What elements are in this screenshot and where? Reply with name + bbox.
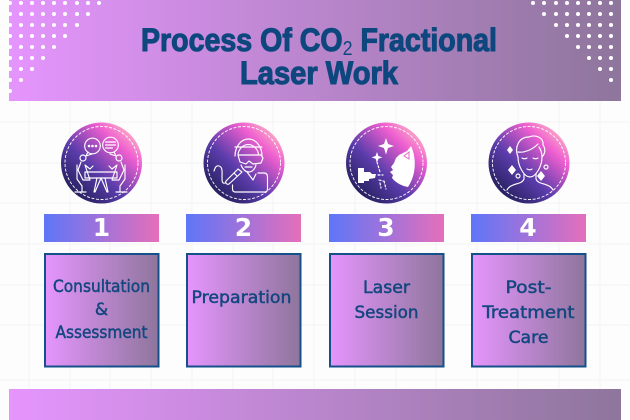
title: Laser Work (240, 55, 398, 91)
card 2 (187, 254, 300, 366)
title: Fractional (353, 22, 497, 58)
card 1: Consultation (53, 277, 150, 297)
number bar 2 (186, 213, 301, 242)
title: Process Of CO (141, 22, 367, 58)
icon: post-treatment care (488, 122, 570, 204)
icon: laser session (346, 122, 427, 204)
step 3 column (329, 122, 444, 366)
card 4: Post- (506, 278, 552, 298)
number bar 3 (329, 213, 444, 242)
number bar 1: 1 (93, 213, 110, 242)
card 3: Session (354, 303, 418, 323)
number bar 2: 2 (235, 213, 252, 242)
footer banner (9, 389, 621, 420)
number bar 1 (44, 213, 159, 242)
icon: preparation (204, 122, 284, 204)
dot pattern right (531, 1, 613, 82)
card 1 (45, 254, 158, 366)
card 4 (472, 254, 586, 366)
step 2 column (186, 122, 301, 366)
card 4: Treatment (481, 303, 575, 323)
title: 2 (343, 38, 353, 60)
card 1: Assessment (56, 323, 148, 343)
icon: consultation (61, 122, 142, 204)
card 3: Laser (363, 278, 410, 298)
number bar 4: 4 (519, 213, 537, 242)
card 3 (330, 254, 444, 366)
title (141, 22, 497, 91)
card 4: Care (508, 328, 548, 348)
card 2: Preparation (192, 288, 292, 308)
number bar 3: 3 (377, 213, 395, 242)
dot pattern left (8, 1, 101, 93)
header banner (8, 0, 621, 101)
card 1: & (95, 300, 108, 320)
step 4 column (471, 122, 586, 366)
number bar 4 (471, 213, 586, 242)
step 1 column (44, 122, 159, 366)
